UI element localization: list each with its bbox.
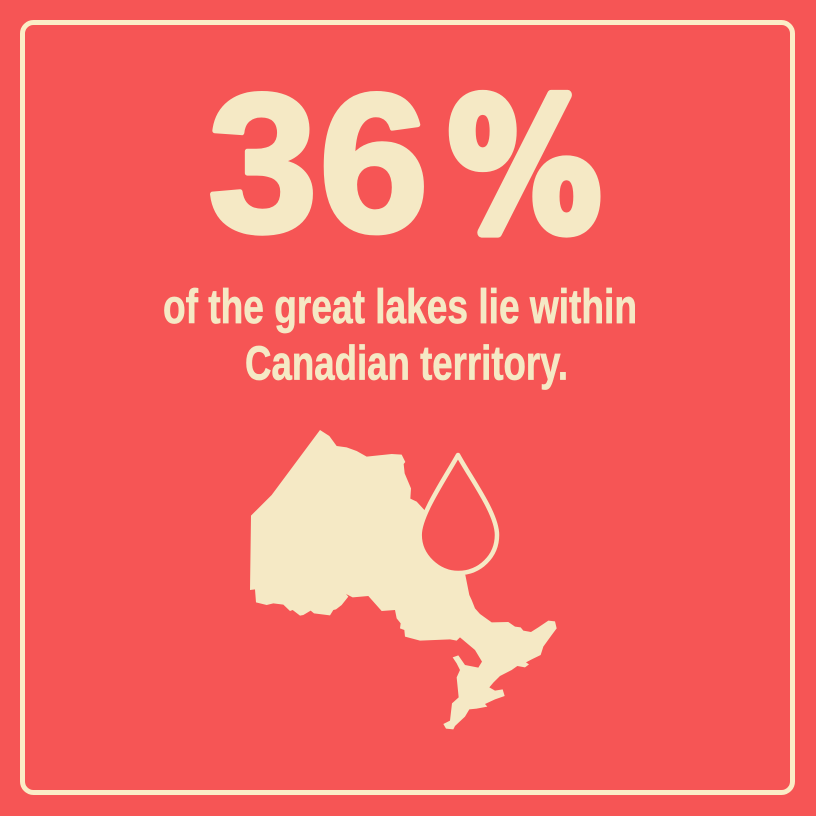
subheading text: Canadian territory. <box>245 338 568 390</box>
icon: map of Ontario with water drop <box>250 430 557 729</box>
icon: water drop <box>420 455 497 573</box>
map of Ontario <box>250 430 557 729</box>
subheading text: of the great lakes lie within <box>163 281 637 334</box>
headline statistic: 36% <box>208 53 601 273</box>
headline statistic: 36%: 6 <box>319 53 429 273</box>
headline statistic: 36%: 3 <box>208 53 318 273</box>
subheading text <box>163 281 637 390</box>
headline statistic: 36%: % <box>448 61 601 273</box>
